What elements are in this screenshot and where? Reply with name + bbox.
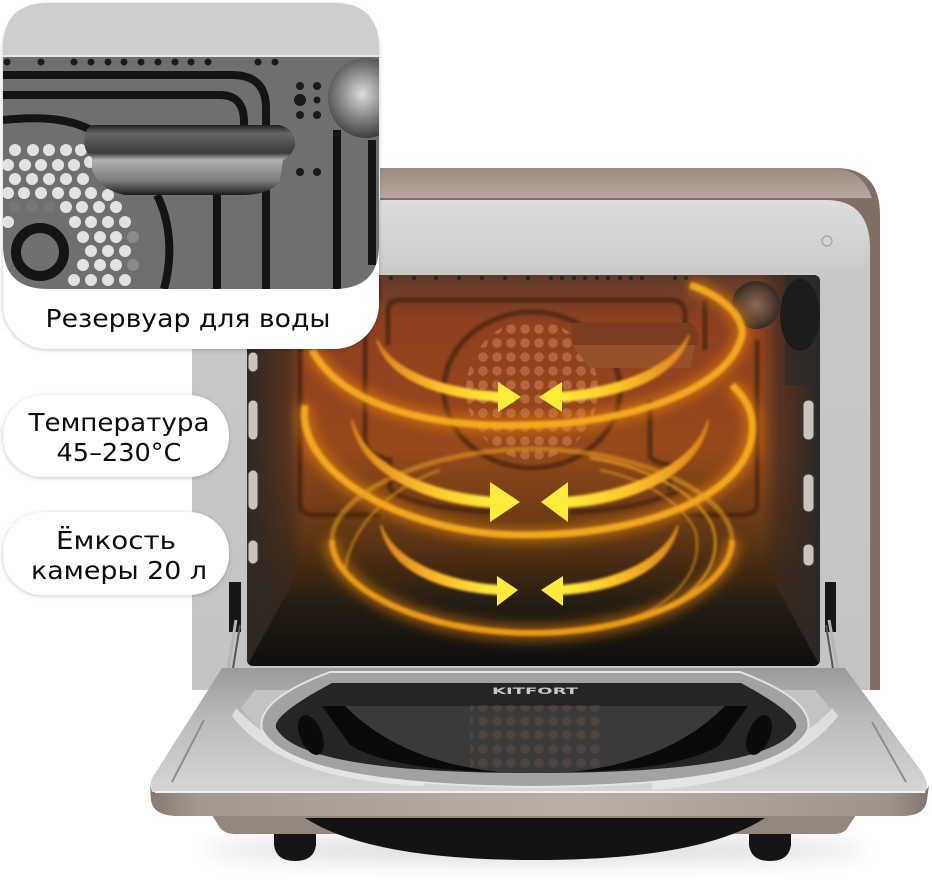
lamp bbox=[328, 58, 379, 138]
fan grille bbox=[466, 324, 598, 460]
callout: chamber capacity: Ёмкость bbox=[56, 526, 176, 555]
frame screw bbox=[822, 236, 832, 246]
airflow arrows bbox=[351, 335, 709, 606]
oven top surface bbox=[380, 168, 872, 198]
panel: water tank callout bbox=[2, 3, 404, 349]
arrow shafts bbox=[351, 335, 709, 595]
oven outer shell bbox=[380, 168, 880, 690]
under-door base bbox=[210, 812, 858, 834]
top vent holes bbox=[389, 276, 688, 280]
arrowheads bbox=[490, 382, 568, 606]
back wall embossed lines bbox=[300, 280, 757, 515]
close-up photo bbox=[2, 3, 404, 289]
embossed lines bbox=[3, 75, 372, 289]
callout: temperature: 45–230°C bbox=[56, 438, 182, 467]
oven front frame bbox=[192, 200, 870, 690]
rack slots right bbox=[803, 400, 814, 566]
left wall bbox=[247, 349, 302, 664]
door underside bowl bbox=[305, 818, 765, 860]
water tank handle bbox=[84, 125, 295, 195]
floor shadow bbox=[205, 836, 865, 864]
grille holes bbox=[2, 144, 139, 286]
door pressed panel bbox=[241, 690, 830, 778]
callout: chamber capacity bbox=[3, 512, 229, 595]
airflow rings glow bbox=[304, 285, 752, 633]
oven bbox=[150, 168, 929, 864]
right wall bbox=[762, 275, 820, 666]
oven feet bbox=[274, 825, 791, 861]
card label: Резервуар для воды bbox=[46, 304, 330, 333]
door brand mark: KITFORT bbox=[492, 687, 580, 697]
airflow rings bbox=[304, 285, 752, 633]
door window bbox=[276, 683, 796, 773]
water tank bbox=[572, 323, 699, 368]
oven cavity bbox=[247, 275, 820, 666]
right hinge bbox=[825, 582, 840, 687]
callout: temperature: Температура bbox=[27, 408, 210, 437]
top vent dots bbox=[4, 58, 321, 176]
door front lip bbox=[150, 785, 929, 816]
rack slots left bbox=[248, 352, 258, 564]
lamp bbox=[732, 279, 820, 351]
door panel highlights bbox=[232, 708, 838, 790]
callout: temperature bbox=[3, 395, 229, 477]
door lip highlight bbox=[155, 791, 925, 793]
door lip recess lines bbox=[172, 720, 906, 782]
door window bezel bbox=[261, 672, 809, 787]
card background bbox=[3, 3, 379, 349]
left hinge bbox=[226, 582, 241, 687]
callout: chamber capacity: камеры 20 л bbox=[31, 556, 207, 585]
door inner panel bbox=[151, 668, 927, 792]
